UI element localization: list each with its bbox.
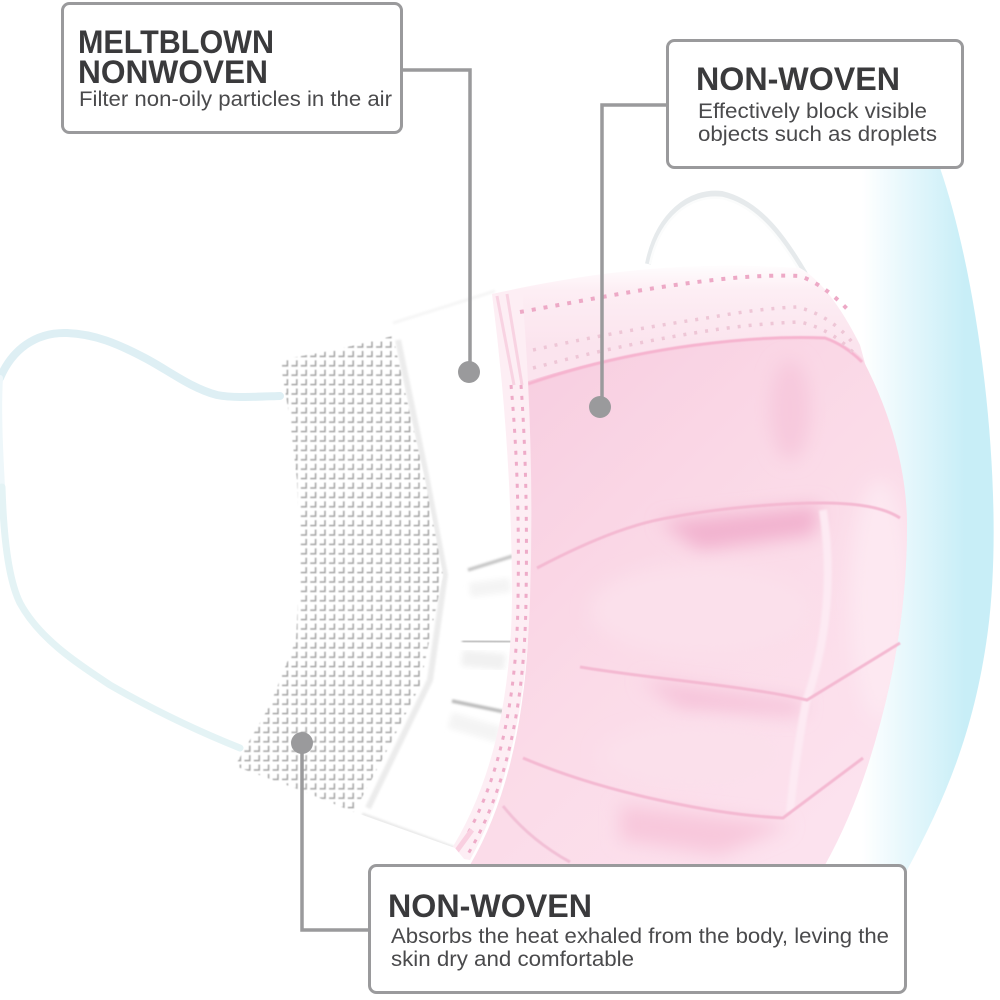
callout connector lines and markers bbox=[291, 70, 668, 930]
callout: non-woven inner bbox=[370, 866, 906, 992]
pink outer layer bbox=[447, 266, 910, 865]
ear loop: right bbox=[648, 194, 805, 276]
callout: non-woven inner: NON-WOVEN bbox=[388, 888, 592, 924]
callout: non-woven outer: Effectively block visible bbox=[698, 99, 927, 123]
side stitched strip bbox=[447, 290, 531, 860]
callout: meltblown nonwoven: MELTBLOWN bbox=[78, 24, 274, 60]
callout: non-woven outer: objects such as droplets bbox=[698, 122, 937, 146]
connector: outer non-woven bbox=[589, 105, 668, 418]
mesh inner layer bbox=[235, 336, 443, 812]
connector: inner non-woven bbox=[291, 732, 369, 930]
pleat lines bbox=[503, 338, 900, 862]
callout: meltblown nonwoven: Filter non-oily particles in the air bbox=[79, 87, 392, 111]
callout: non-woven outer: NON-WOVEN bbox=[696, 61, 900, 97]
connector: meltblown bbox=[402, 70, 480, 383]
callout: non-woven inner: Absorbs the heat exhaled from the body, leving the bbox=[391, 924, 889, 948]
callout: non-woven inner: skin dry and comfortable bbox=[391, 947, 634, 971]
callout: meltblown nonwoven bbox=[62, 4, 402, 132]
top band bbox=[492, 266, 875, 400]
callout: meltblown nonwoven: NONWOVEN bbox=[78, 54, 268, 90]
main body bbox=[470, 338, 907, 865]
mask bottom cover bbox=[354, 812, 470, 866]
callout: non-woven outer bbox=[668, 40, 962, 168]
white middle layer bbox=[360, 291, 540, 850]
blue background crescent bbox=[800, 168, 994, 872]
ear loop: left bbox=[0, 333, 280, 748]
stitching dots bbox=[520, 276, 858, 368]
